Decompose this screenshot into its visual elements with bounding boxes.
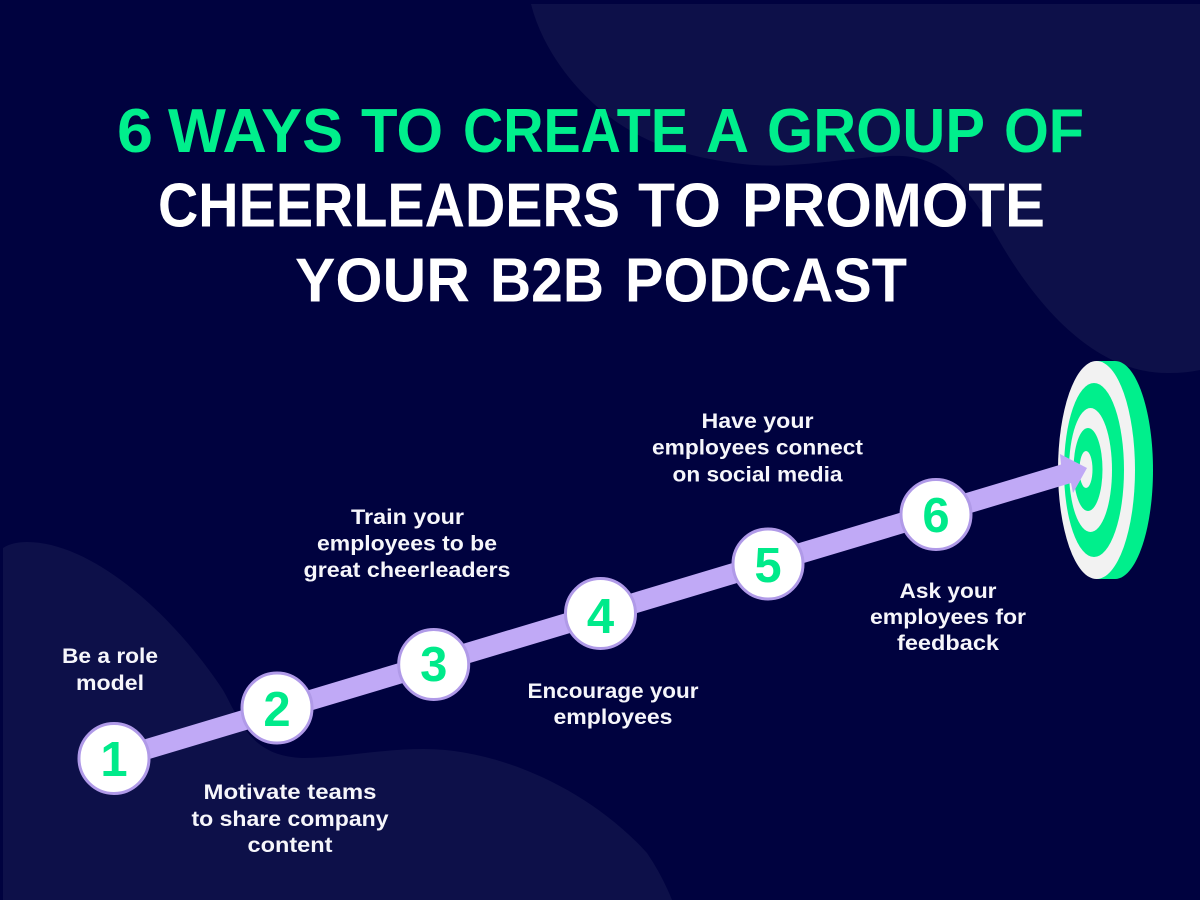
step 6 marker (901, 480, 971, 550)
title: CREATE (463, 97, 688, 166)
label: step 3: great cheerleaders (304, 558, 511, 582)
label: step 6 (870, 579, 1027, 655)
step 4 marker (566, 578, 636, 648)
title: 6 (117, 97, 153, 166)
step 5 marker (733, 529, 803, 599)
title: CHEERLEADERS (158, 172, 620, 240)
label: step 5: on social media (672, 462, 844, 486)
title: TO (361, 97, 443, 166)
title: PODCAST (625, 246, 907, 316)
label: step 3 (304, 505, 511, 582)
label: step 4: Encourage your (528, 679, 699, 703)
step 5 marker: 5 (754, 539, 782, 593)
title: A (706, 97, 749, 166)
step 4 marker: 4 (587, 590, 614, 644)
label: step 4: employees (554, 705, 673, 729)
step 1 marker: 1 (100, 733, 128, 787)
step 6 marker: 6 (922, 489, 950, 543)
label: step 1: model (76, 671, 144, 695)
label: step 2: Motivate teams (204, 780, 377, 804)
step 2 marker: 2 (263, 683, 291, 737)
label: step 6: employees for (870, 605, 1027, 629)
label: step 2: to share company (192, 807, 389, 831)
label: step 3: Train your (351, 505, 465, 529)
label: step 3: employees to be (317, 532, 497, 556)
icon: target (1058, 361, 1153, 579)
label: step 5 (652, 409, 863, 486)
title: B2B (490, 246, 604, 316)
background blob: top right (531, 4, 1200, 373)
background blob: bottom left (3, 542, 672, 900)
label: step 5: Have your (702, 409, 814, 433)
title: PROMOTE (742, 172, 1045, 240)
step 3 marker (399, 630, 469, 700)
label: step 4 (528, 679, 699, 729)
title: GROUP (767, 97, 985, 166)
label: step 1: Be a role (62, 644, 158, 668)
title: WAYS (168, 97, 343, 166)
label: step 6: Ask your (900, 579, 997, 603)
label: step 2: content (248, 833, 332, 857)
arrow path (114, 454, 1087, 770)
step 2 marker (242, 673, 312, 743)
step 1 marker (79, 724, 149, 794)
label: step 2 (192, 780, 389, 857)
title: YOUR (295, 246, 470, 316)
label: step 5: employees connect (652, 436, 863, 460)
step 3 marker: 3 (420, 638, 447, 692)
title (117, 97, 1084, 316)
title: OF (1004, 97, 1084, 166)
label: step 1 (62, 644, 158, 695)
title: TO (638, 172, 721, 240)
label: step 6: feedback (897, 631, 999, 655)
